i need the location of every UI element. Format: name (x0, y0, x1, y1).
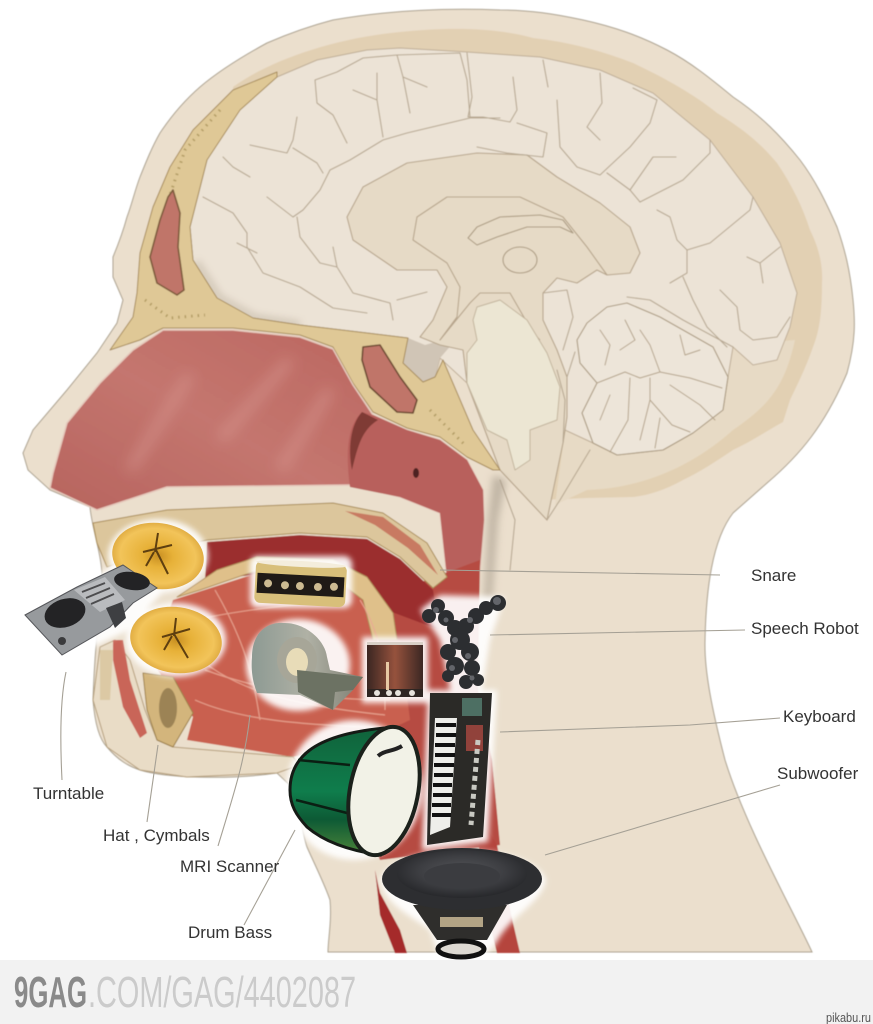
inner lobe fill (413, 197, 540, 340)
brain folds (203, 53, 790, 570)
label: Snare: Snare (751, 566, 796, 585)
labels (33, 566, 859, 942)
label: Subwoofer: Subwoofer (777, 764, 859, 783)
sphenoid sinus (362, 345, 417, 413)
brainstem (467, 300, 560, 470)
brain shadow along skull (196, 262, 300, 325)
cerebellum (577, 303, 728, 455)
icon: keyboard (427, 693, 492, 845)
tongue (150, 570, 410, 757)
icon: subwoofer (382, 848, 542, 957)
label: Keyboard: Keyboard (783, 707, 856, 726)
leader lines (61, 570, 780, 925)
brain shadow near fissure (403, 335, 460, 382)
brain (190, 48, 797, 520)
label: Speech Robot: Speech Robot (751, 619, 859, 638)
label: Hat, Cymbals: Hat , Cymbals (103, 826, 210, 845)
cerebellum folds (597, 320, 722, 452)
nasal highlights (130, 360, 330, 470)
icon: cymbal lower (126, 601, 226, 679)
lip stripe (100, 650, 113, 700)
footer logo text: 9GAG (14, 968, 87, 1017)
footer logo text: .COM/GAG/4402087 (88, 968, 356, 1017)
label: MRI Scanner: MRI Scanner (180, 857, 280, 876)
rear nasal chamber (348, 412, 484, 590)
label: Drum Bass: Drum Bass (188, 923, 272, 942)
icon: MRI scanner (252, 623, 363, 710)
icon: cymbal top (108, 517, 208, 595)
instrument halos (20, 519, 546, 960)
lip (113, 640, 147, 738)
jaw bone (143, 673, 193, 747)
frontal sinus (150, 190, 184, 295)
rear throat shadow (484, 475, 506, 600)
icon: tom drum (367, 642, 423, 697)
lower jaw (93, 640, 300, 777)
icon: bass drum (290, 721, 430, 861)
lower throat strip (478, 817, 520, 953)
label: Turntable: Turntable (33, 784, 104, 803)
nasal cavity (50, 330, 484, 577)
palate (93, 503, 447, 588)
footer bar (0, 960, 873, 1024)
oral cavity (205, 535, 440, 630)
icon: speech robot (422, 595, 506, 689)
muscle fibres (190, 590, 390, 728)
icon: snare drum (254, 559, 347, 607)
tongue surface (177, 557, 397, 640)
skull bone (110, 72, 500, 470)
icon: turntable (25, 565, 157, 655)
fornix (468, 215, 573, 245)
footer logo text (14, 968, 356, 1017)
bone speckle (145, 110, 465, 445)
corpus callosum and midbrain (347, 153, 640, 520)
throat (340, 560, 500, 860)
meningeal band (233, 29, 822, 500)
thalamus (503, 247, 537, 273)
under-cerebellum zone (555, 340, 795, 505)
